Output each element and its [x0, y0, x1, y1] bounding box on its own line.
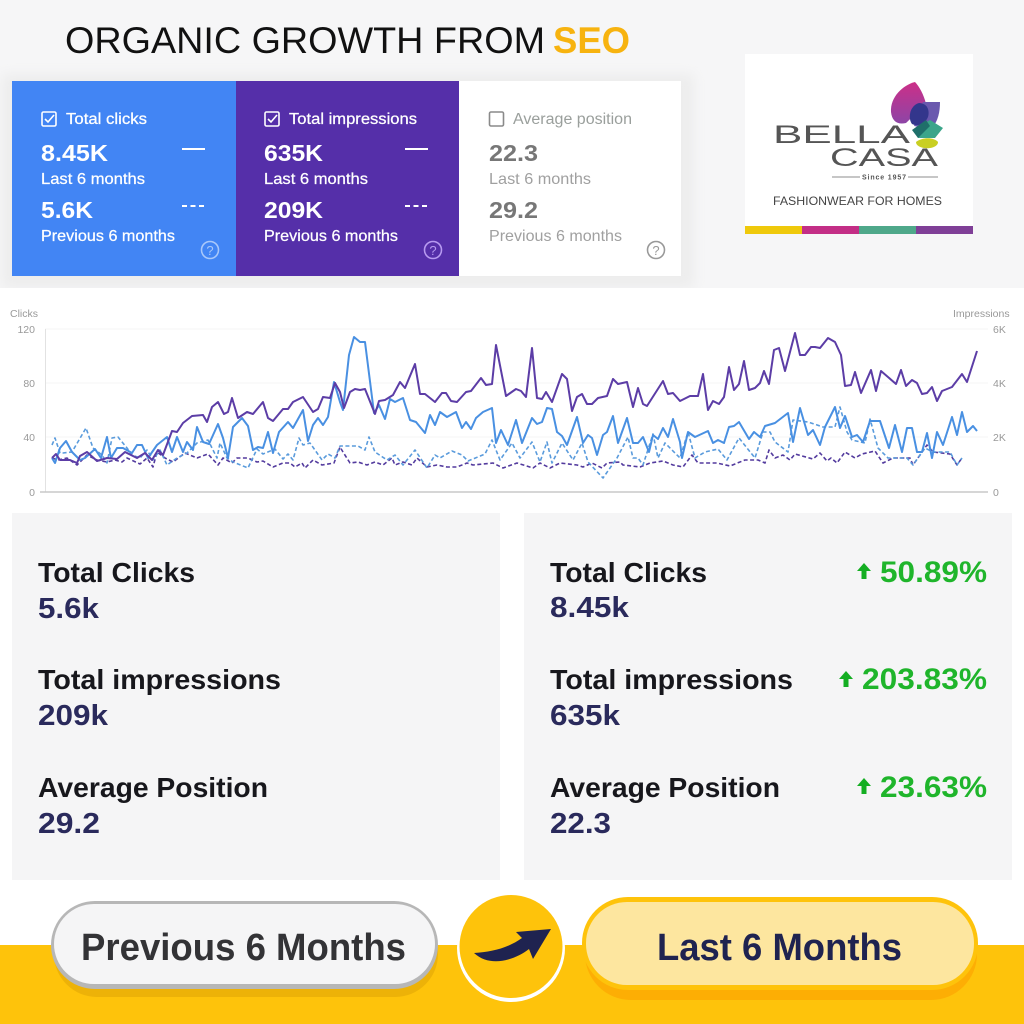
right axis labels	[953, 308, 1010, 499]
panel: average position card: 29.2	[489, 197, 538, 223]
icon: clicks help: ?	[206, 243, 214, 258]
right axis labels: 4K	[993, 378, 1006, 390]
panel: previous period stats: Total Clicks	[38, 557, 195, 588]
icon: position help: ?	[652, 243, 660, 258]
button: last 6 months	[582, 897, 978, 1000]
panel: previous period stats: 29.2	[38, 808, 100, 840]
series: impressions previous 6 months	[52, 445, 962, 468]
footer yellow band	[0, 945, 1024, 1024]
panel: previous period stats	[12, 513, 500, 880]
panel: total clicks card: 8.45K	[41, 140, 108, 166]
panel: last period stats: 635k	[550, 700, 621, 732]
icon: arrow in circle	[457, 894, 565, 1002]
panel: total impressions card: Total impressions	[289, 111, 417, 128]
chart: clicks and impressions over time	[10, 308, 1010, 499]
panel: total impressions card: Last 6 months	[264, 171, 368, 188]
button: last 6 months: Last 6 Months	[657, 927, 902, 969]
panel: total impressions card: 635K	[264, 140, 323, 166]
panel: previous period stats: Total impressions	[38, 664, 281, 695]
change: impressions up: 203.83%	[862, 663, 987, 696]
panel: total impressions card: 209K	[264, 197, 323, 223]
icon: impressions checkbox	[265, 112, 279, 126]
left axis labels: 40	[23, 432, 35, 444]
icon: logo petals	[891, 82, 943, 148]
icon: position help	[648, 242, 664, 258]
panel: last period stats	[524, 513, 1012, 880]
panel: average position card: Last 6 months	[489, 171, 591, 188]
left axis labels: Clicks	[10, 308, 38, 320]
button: previous 6 months: Previous 6 Months	[81, 927, 406, 969]
panel: total clicks card: Last 6 months	[41, 171, 145, 188]
panel: average position card: Previous 6 months	[489, 228, 622, 245]
series: clicks last 6 months	[52, 337, 977, 463]
icon: position checkbox	[490, 112, 504, 126]
panel: total clicks card	[12, 81, 236, 276]
panel: total impressions card: Previous 6 months	[264, 228, 398, 245]
panel: last period stats: Average Position	[550, 772, 780, 803]
title: SEO	[553, 20, 630, 61]
logo: Bella Casa	[745, 54, 973, 234]
panel: last period stats: Total Clicks	[550, 557, 707, 588]
panel: average position card: 22.3	[489, 140, 538, 166]
right axis labels: Impressions	[953, 308, 1010, 320]
panel: previous period stats: 5.6k	[38, 593, 100, 625]
change: clicks up: 50.89%	[880, 556, 987, 589]
title: ORGANIC GROWTH FROM	[65, 20, 545, 61]
left axis labels: 0	[29, 487, 35, 499]
logo: Bella Casa: FASHIONWEAR FOR HOMES	[773, 194, 942, 208]
left axis labels: 80	[23, 378, 35, 390]
panel: total clicks card: 5.6K	[41, 197, 93, 223]
panel: previous period stats: 209k	[38, 700, 109, 732]
series: clicks previous 6 months	[52, 407, 962, 478]
panel: last period stats: 22.3	[550, 808, 611, 840]
right axis labels: 0	[993, 487, 999, 499]
panel: previous period stats: Average Position	[38, 772, 268, 803]
icon: clicks help	[202, 242, 218, 258]
panel: total impressions card	[236, 81, 459, 276]
icon: impressions help: ?	[429, 243, 437, 258]
icon: clicks checkbox	[42, 112, 56, 126]
panel: average position card	[459, 81, 681, 276]
icon: impressions help	[424, 242, 442, 258]
change: position up: 23.63%	[880, 771, 987, 804]
panel: last period stats: 8.45k	[550, 592, 630, 624]
series: impressions last 6 months	[52, 333, 977, 463]
left axis labels: 120	[17, 324, 35, 336]
panel: total clicks card: Previous 6 months	[41, 228, 175, 245]
right axis labels: 6K	[993, 324, 1006, 336]
panel: total clicks card: Total clicks	[66, 111, 147, 128]
panel: last period stats: Total impressions	[550, 664, 793, 695]
panel: average position card: Average position	[513, 111, 632, 128]
left axis labels	[10, 308, 38, 499]
logo: Bella Casa: CASA	[830, 144, 938, 172]
right axis labels: 2K	[993, 432, 1006, 444]
logo: Bella Casa: Since 1957	[862, 174, 906, 182]
button: previous 6 months	[51, 901, 438, 997]
logo: Bella Casa: BELLA	[773, 121, 911, 149]
